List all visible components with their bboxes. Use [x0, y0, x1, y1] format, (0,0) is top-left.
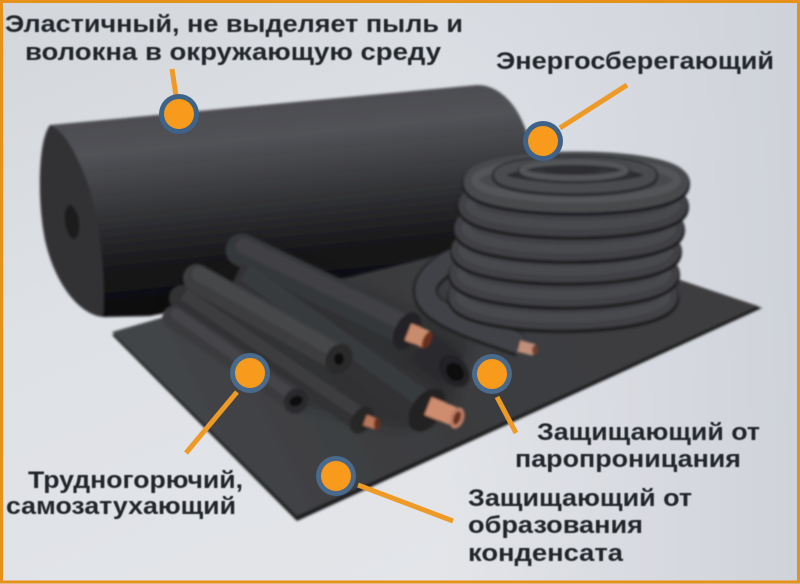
- marker: energy saving: [523, 121, 563, 161]
- label: energy saving: Энергосберегающий: [496, 48, 774, 75]
- leader line: vapour barrier: [497, 397, 516, 433]
- label: fire resistant: самозатухающий: [6, 493, 236, 520]
- coil of insulated tube: [425, 161, 677, 355]
- pipe: long upper tube: [242, 246, 434, 354]
- pipe: short tube behind: [420, 346, 476, 393]
- pipe: small front tube: [174, 314, 313, 419]
- group of insulated pipes: [174, 246, 476, 438]
- label: vapour barrier: паропроницания: [515, 446, 741, 473]
- marker: condensation: [316, 456, 356, 496]
- label: condensation protection: [468, 485, 692, 567]
- loose tube end: [425, 257, 538, 355]
- label: elastic, no dust: Эластичный, не выделяет пыль и: [5, 11, 463, 38]
- label: condensation protection: конденсата: [468, 540, 624, 567]
- leader line: condensation: [358, 485, 453, 521]
- pipe: middle tube with hole: [197, 274, 358, 379]
- marker: fire resistant: [230, 353, 270, 393]
- marker: vapour barrier: [472, 354, 512, 394]
- label: condensation protection: Защищающий от: [468, 485, 692, 512]
- large insulation roll: [40, 85, 534, 317]
- pipe: large front tube: [232, 263, 467, 438]
- label: elastic, no dust: [5, 11, 463, 66]
- label: vapour barrier: [515, 419, 760, 473]
- coil turns: [460, 161, 677, 320]
- label: fire resistant: Трудногорючий,: [28, 467, 243, 494]
- marker: elastic: [159, 94, 199, 134]
- pipe: thin tube with copper end: [182, 294, 380, 438]
- leader line: energy saving: [560, 85, 627, 128]
- coil top spiral: [499, 162, 651, 189]
- leader line: elastic: [172, 69, 176, 96]
- label: fire resistant: [6, 467, 243, 520]
- leader line: fire resistant: [186, 392, 237, 453]
- small shadow under the pipes: [165, 240, 470, 430]
- insulation sheet: [112, 238, 762, 521]
- label: elastic, no dust: волокна в окружающую среду: [25, 39, 442, 66]
- label: condensation protection: образования: [468, 512, 643, 539]
- label: vapour barrier: Защищающий от: [537, 419, 760, 446]
